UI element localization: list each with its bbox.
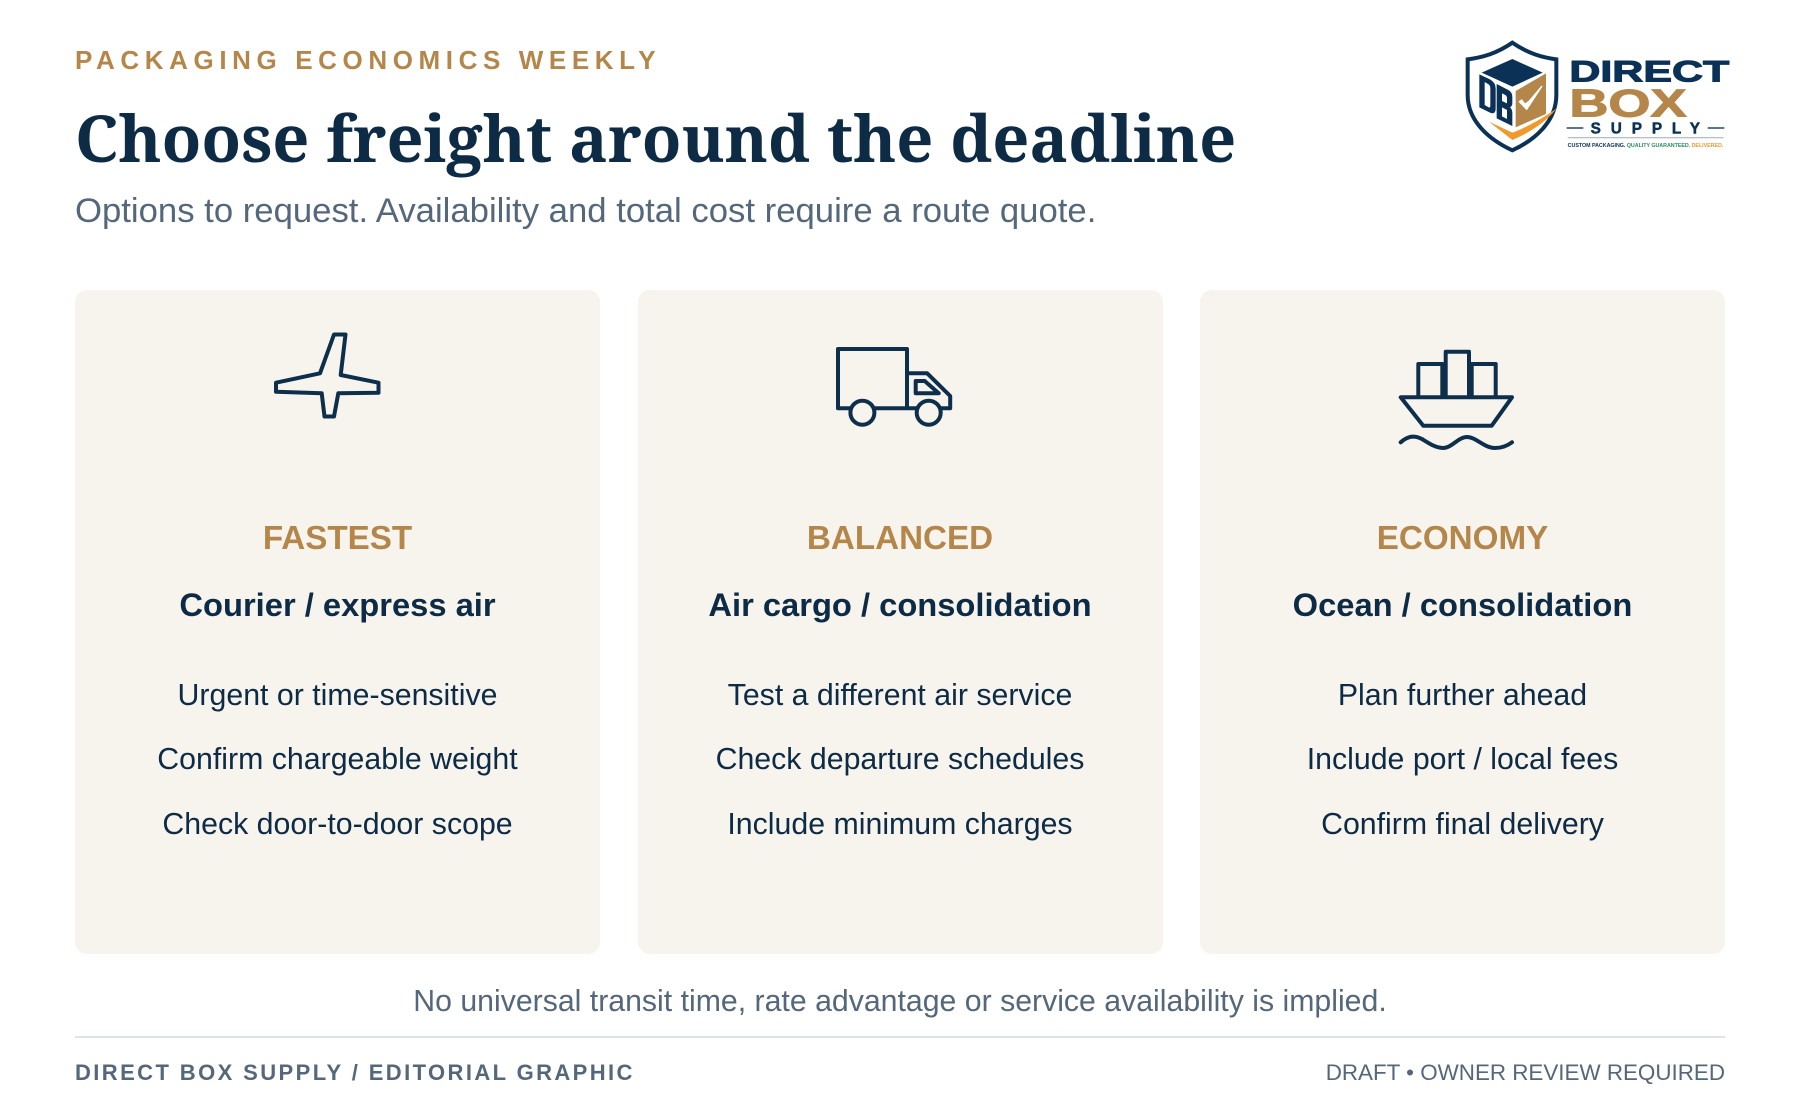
- panel: economy: [1200, 290, 1725, 954]
- eyebrow: PACKAGING ECONOMICS WEEKLY: [75, 45, 661, 75]
- service: ocean: Ocean / consolidation: [1293, 586, 1632, 623]
- panel: fastest: [75, 290, 600, 954]
- list: economy considerations: [1307, 678, 1618, 840]
- icon: cargo ship: [1398, 350, 1514, 450]
- icon: truck: [836, 347, 952, 427]
- footer left: DIRECT BOX SUPPLY / EDITORIAL GRAPHIC: [75, 1060, 635, 1085]
- logo wordmark: CUSTOM PACKAGING. QUALITY GUARANTEED. DELIVERED.: [1568, 143, 1724, 149]
- logo: Direct Box Supply: [1466, 40, 1730, 152]
- label: balanced: BALANCED: [807, 520, 993, 557]
- service: air cargo: Air cargo / consolidation: [708, 586, 1092, 623]
- panel: balanced: [638, 290, 1162, 954]
- logo shield: [1468, 43, 1557, 150]
- label: fastest: FASTEST: [263, 520, 412, 557]
- logo wordmark: SUPPLY: [1591, 120, 1700, 137]
- list: economy considerations: Plan further ahead: [1338, 678, 1587, 712]
- logo wordmark: DIRECT: [1569, 56, 1729, 89]
- subtitle: Options to request. Availability and total cost require a route quote.: [75, 192, 1096, 230]
- list: fastest considerations: Urgent or time-sensitive: [178, 678, 497, 712]
- logo wordmark: BOX: [1569, 82, 1687, 126]
- title: Choose freight around the deadline: [75, 93, 1236, 181]
- icon: airplane: [274, 332, 380, 418]
- list: balanced considerations: Test a different air service: [728, 678, 1072, 712]
- disclaimer note: No universal transit time, rate advantage or service availability is implied.: [413, 985, 1387, 1018]
- list: balanced considerations: Check departure schedules: [716, 742, 1084, 776]
- label: economy: ECONOMY: [1377, 520, 1548, 557]
- list: balanced considerations: Include minimum charges: [727, 808, 1073, 840]
- service: courier: Courier / express air: [179, 586, 496, 623]
- list: fastest considerations: [157, 678, 518, 840]
- list: balanced considerations: [716, 678, 1084, 840]
- list: fastest considerations: Check door-to-door scope: [162, 808, 513, 840]
- list: fastest considerations: Confirm chargeable weight: [157, 742, 518, 776]
- footer right: DRAFT • OWNER REVIEW REQUIRED: [1326, 1060, 1725, 1085]
- list: economy considerations: Include port / local fees: [1307, 742, 1618, 776]
- list: economy considerations: Confirm final delivery: [1321, 808, 1604, 840]
- logo wordmark: [1567, 56, 1729, 149]
